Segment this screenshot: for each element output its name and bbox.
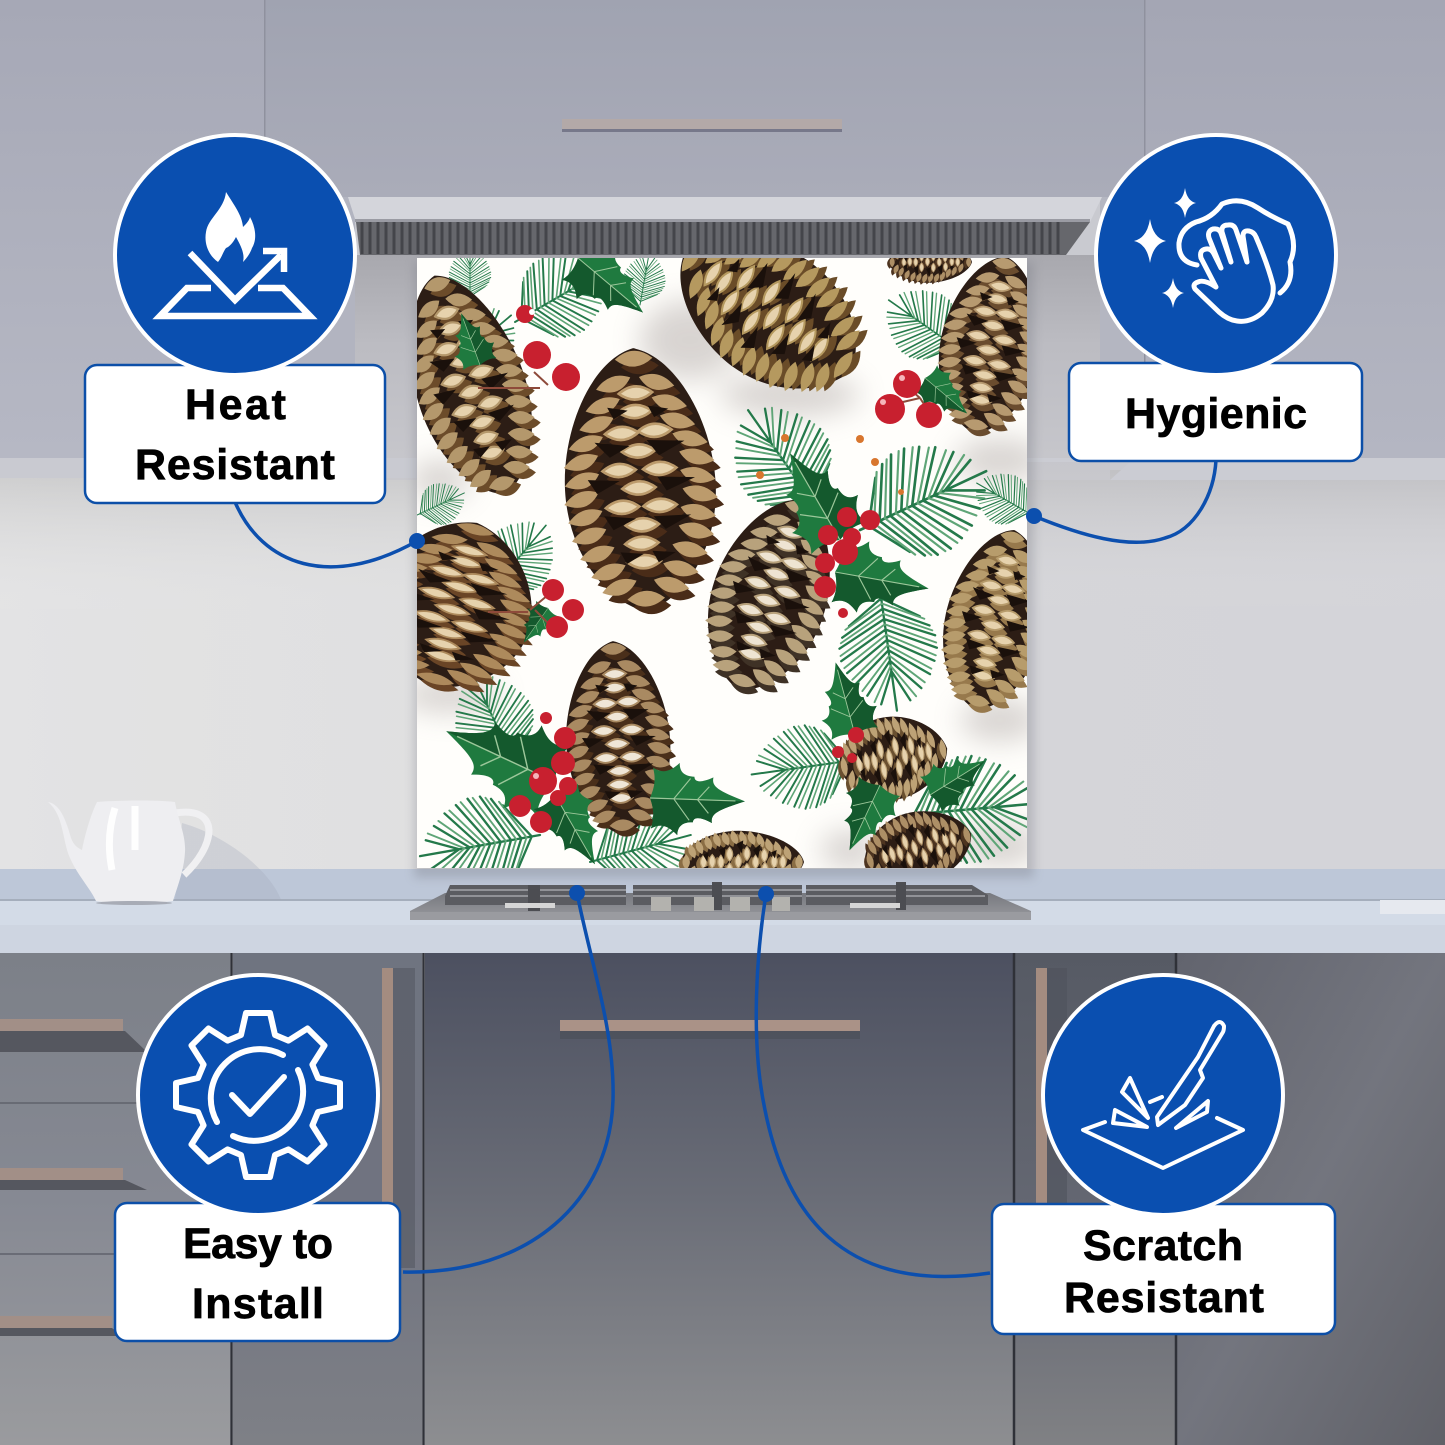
label text: heat resistant: Resistant	[135, 441, 335, 489]
icon: gear with check mark	[176, 1013, 340, 1177]
cast shadows	[400, 300, 1045, 870]
holly leaves	[427, 233, 998, 879]
badge: easy to install	[138, 975, 378, 1215]
label text: heat resistant: Heat	[185, 381, 286, 429]
icon: knife scratching surface	[1083, 1022, 1243, 1168]
label text: easy to install: Install	[192, 1280, 324, 1328]
backsplash wall	[0, 255, 1445, 870]
label box: easy to install	[115, 1203, 400, 1341]
red berries	[478, 305, 942, 833]
pine sprigs	[408, 234, 1045, 904]
upper cabinets	[0, 0, 1445, 480]
feature: easy to install	[115, 885, 613, 1341]
worktop	[0, 869, 1445, 953]
panel shadow	[414, 262, 1034, 878]
gas hob	[410, 882, 1031, 920]
label text: hygienic: Hygienic	[1125, 390, 1307, 438]
badge: scratch resistant	[1043, 975, 1283, 1215]
connector: hygienic	[1026, 460, 1216, 542]
label text: easy to install	[183, 1220, 333, 1328]
label text: scratch resistant	[1064, 1222, 1264, 1322]
feature: heat resistant	[85, 135, 425, 567]
pine cones	[356, 195, 1067, 901]
lower cabinets	[0, 953, 1445, 1445]
icon: hand wiping with sparkles	[1134, 188, 1294, 321]
icon: flame on surface	[160, 192, 310, 316]
badge: heat resistant	[115, 135, 355, 375]
connector: scratch resistant	[756, 886, 990, 1276]
connector: easy to install	[403, 885, 613, 1272]
panel: pine cone and holly splashback	[417, 258, 1027, 868]
label text: easy to install: Easy to	[183, 1220, 333, 1268]
feature: scratch resistant	[756, 886, 1335, 1334]
label text: scratch resistant: Scratch	[1083, 1222, 1243, 1270]
label text: scratch resistant: Resistant	[1064, 1274, 1264, 1322]
label box: hygienic	[1069, 363, 1362, 461]
upper cabinet handle	[562, 119, 842, 132]
cabinet handles	[0, 968, 1067, 1336]
extractor hood	[348, 197, 1102, 255]
label box: heat resistant	[85, 365, 385, 503]
label text: heat resistant	[135, 381, 335, 489]
badge: hygienic	[1096, 135, 1336, 375]
feature: hygienic	[1026, 135, 1362, 542]
label box: scratch resistant	[992, 1204, 1335, 1334]
white kettle	[48, 800, 281, 905]
connector: heat resistant	[235, 502, 425, 567]
